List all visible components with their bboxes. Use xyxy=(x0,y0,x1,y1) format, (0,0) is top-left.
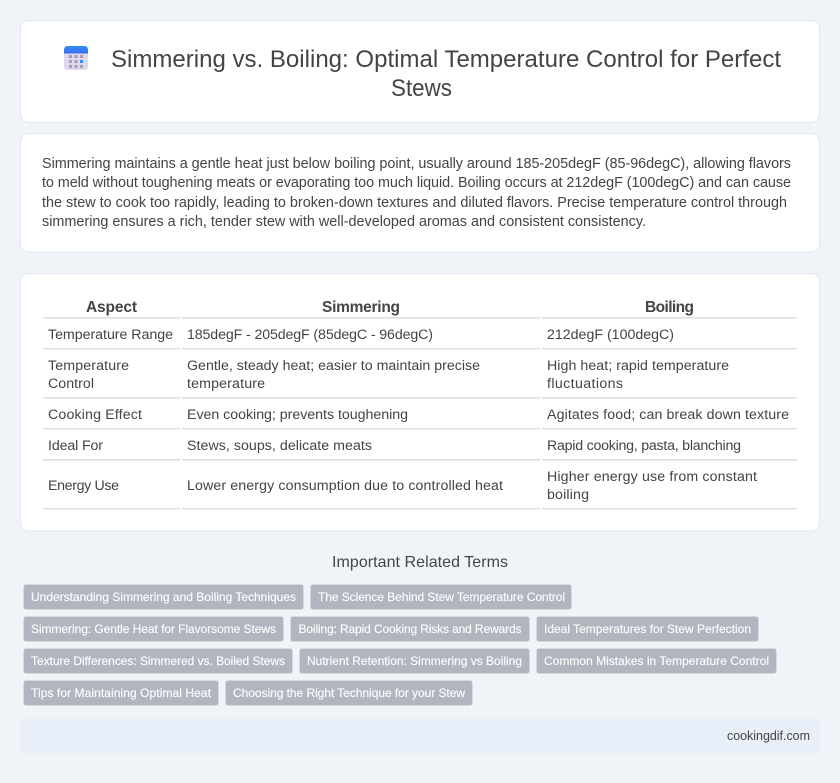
row: temperature control: Gentle, steady heat; easier to maintain precise xyxy=(187,358,480,374)
title: Simmering vs. Boiling: Optimal Temperature Control for Perfect xyxy=(111,46,781,73)
related term chips: Choosing the Right Technique for your Stew xyxy=(233,686,465,700)
related term chips: Simmering: Gentle Heat for Flavorsome Stews xyxy=(31,622,276,636)
related term chips: Nutrient Retention: Simmering vs Boiling xyxy=(307,654,522,668)
row: energy use: Higher energy use from constant xyxy=(547,469,757,485)
table header xyxy=(86,299,694,316)
row: ideal for xyxy=(48,438,741,454)
row: energy use: boiling xyxy=(547,487,589,503)
row: cooking effect xyxy=(48,407,789,423)
row: temperature control: Control xyxy=(48,376,94,392)
text block: introduction: to meld without toughening meats or evaporating too much liquid. Boiling occurs at 212degF (100degC) and can cause xyxy=(42,175,791,191)
row: temperature control: temperature xyxy=(187,376,265,392)
row: ideal for: Stews, soups, delicate meats xyxy=(187,438,372,454)
panel: introduction xyxy=(20,134,820,252)
related term chips: Common Mistakes in Temperature Control xyxy=(544,654,769,668)
table header: Boiling xyxy=(645,299,694,316)
heading: related terms: Important Related Terms xyxy=(332,554,508,571)
related term chips: Understanding Simmering and Boiling Techniques xyxy=(31,590,296,604)
footer xyxy=(20,719,820,753)
text block: introduction: the stew to cook too rapidly, leading to broken-down textures and diluted flavors. Precise temperature control through xyxy=(42,195,787,211)
panel: comparison table xyxy=(20,274,820,531)
row: temperature control: Temperature xyxy=(48,358,129,374)
related term chips: The Science Behind Stew Temperature Control xyxy=(318,590,565,604)
text block: introduction xyxy=(42,156,791,230)
row: energy use: Lower energy consumption due to controlled heat xyxy=(187,478,503,494)
row: temperature control xyxy=(48,358,729,392)
related term chips: Tips for Maintaining Optimal Heat xyxy=(31,686,212,700)
row: temperature range: Temperature Range xyxy=(48,327,173,343)
row: ideal for: Rapid cooking, pasta, blanching xyxy=(547,438,741,454)
icon: calendar xyxy=(64,46,88,70)
row: temperature range: 185degF - 205degF (85degC - 96degC) xyxy=(187,327,433,343)
row: energy use: Energy Use xyxy=(48,478,119,494)
row: cooking effect: Agitates food; can break down texture xyxy=(547,407,789,423)
related term chips: Texture Differences: Simmered vs. Boiled Stews xyxy=(31,654,285,668)
footer: cookingdif.com xyxy=(727,729,810,743)
row: cooking effect: Cooking Effect xyxy=(48,407,142,423)
row: temperature control: fluctuations xyxy=(547,376,623,392)
title: Stews xyxy=(391,75,452,102)
row: ideal for: Ideal For xyxy=(48,438,103,454)
related term chips xyxy=(24,584,776,706)
row: energy use xyxy=(48,469,757,503)
row: temperature range: 212degF (100degC) xyxy=(547,327,674,343)
related term chips: Ideal Temperatures for Stew Perfection xyxy=(544,622,751,636)
table header: Simmering xyxy=(322,299,400,316)
text block: introduction: simmering ensures a rich, tender stew with well-developed aromas and consistent consistency. xyxy=(42,214,646,230)
text block: introduction: Simmering maintains a gentle heat just below boiling point, usually around 185-205degF (85-96degC), allowing flavors xyxy=(42,156,791,172)
table header: Aspect xyxy=(86,299,137,316)
panel: header xyxy=(20,20,820,122)
row: temperature range xyxy=(48,327,674,343)
related term chips: Boiling: Rapid Cooking Risks and Rewards xyxy=(298,622,522,636)
row: temperature control: High heat; rapid temperature xyxy=(547,358,729,374)
title xyxy=(111,46,781,102)
row: cooking effect: Even cooking; prevents toughening xyxy=(187,407,408,423)
